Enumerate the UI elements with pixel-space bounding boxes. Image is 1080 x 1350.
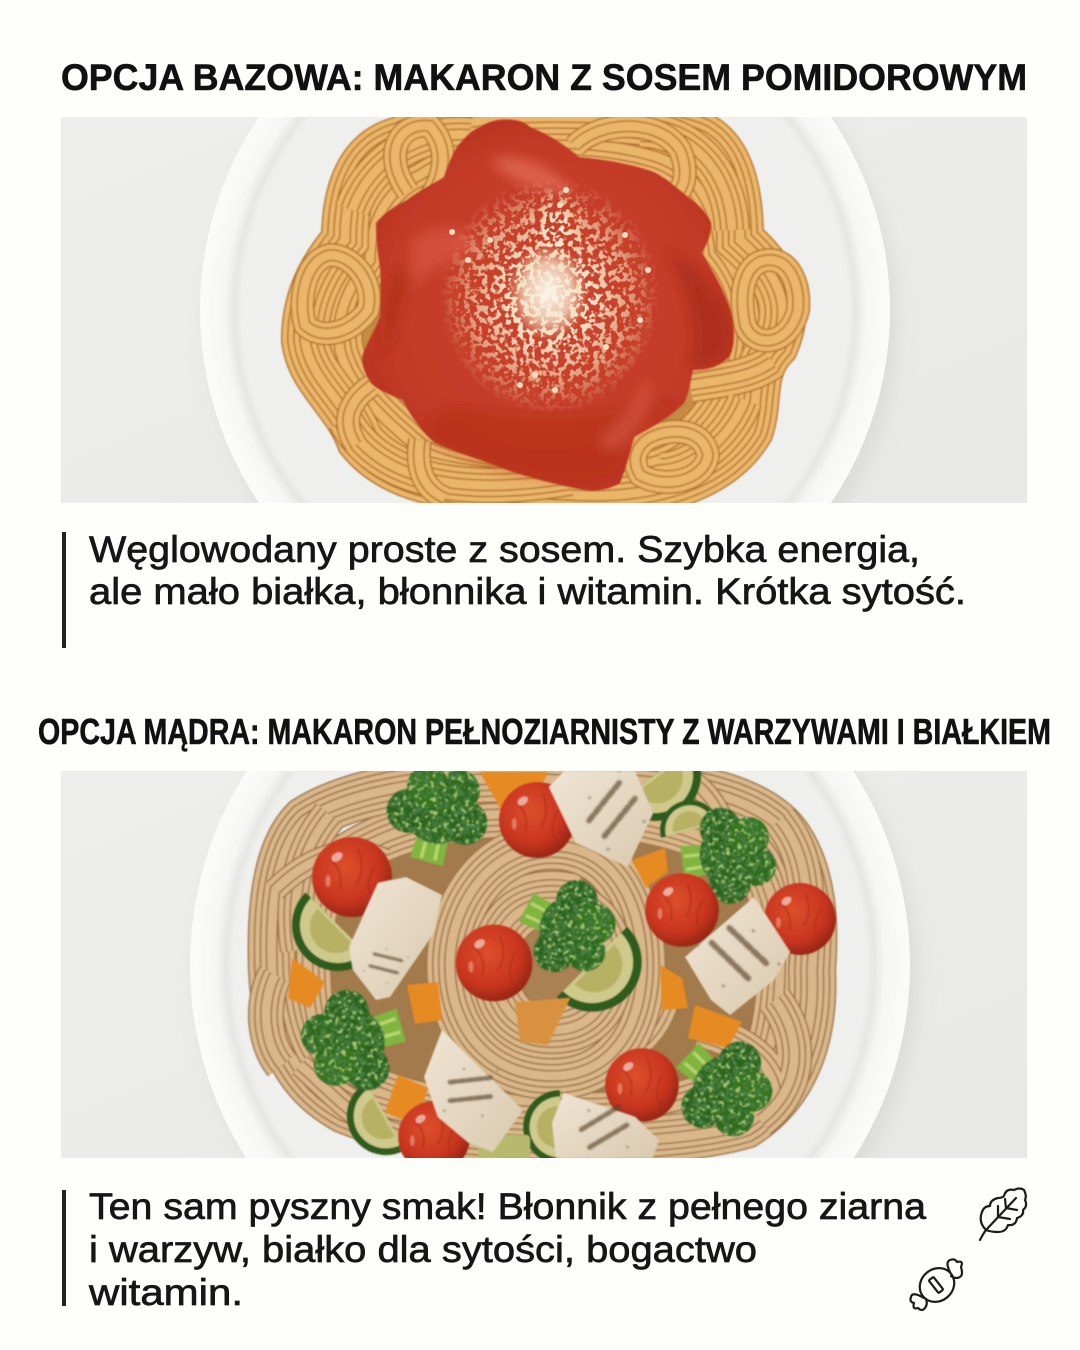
orange pepper pieces (288, 772, 742, 1125)
heading: basic option: OPCJA BAZOWA: MAKARON Z SOSEM POMIDOROWYM (61, 57, 1027, 98)
text block: basic option description: Węglowodany proste z sosem. Szybka energia, (89, 529, 920, 570)
text block: basic option description: ale mało białka, błonnika i witamin. Krótka sytość. (89, 571, 966, 612)
text block: basic option description (62, 529, 966, 648)
grated parmesan (440, 178, 660, 414)
text block: smart option description: witamin. (88, 1272, 243, 1313)
vegetables and chicken (287, 771, 837, 1158)
spaghetti (302, 117, 798, 498)
text block: smart option description: i warzyw, białko dla sytości, bogactwo (89, 1229, 757, 1270)
icon: candy (910, 1259, 962, 1310)
panel: basic option (61, 64, 1027, 648)
panel: smart option (38, 718, 1050, 1312)
text block: smart option description: Ten sam pyszny smak! Błonnik z pełnego ziarna (89, 1186, 926, 1227)
photo: wholegrain pasta with vegetables and chicken (61, 771, 1027, 1158)
cherry tomatoes (312, 782, 836, 1173)
photo: spaghetti with tomato sauce (61, 117, 1027, 503)
text block: smart option description (62, 1186, 926, 1313)
wholegrain pasta (266, 779, 813, 1142)
broccoli florets (300, 771, 777, 1138)
grilled chicken pieces (349, 771, 790, 1161)
icon: leaf (980, 1188, 1026, 1240)
zucchini slices (291, 771, 712, 1158)
tomato sauce (362, 119, 734, 491)
